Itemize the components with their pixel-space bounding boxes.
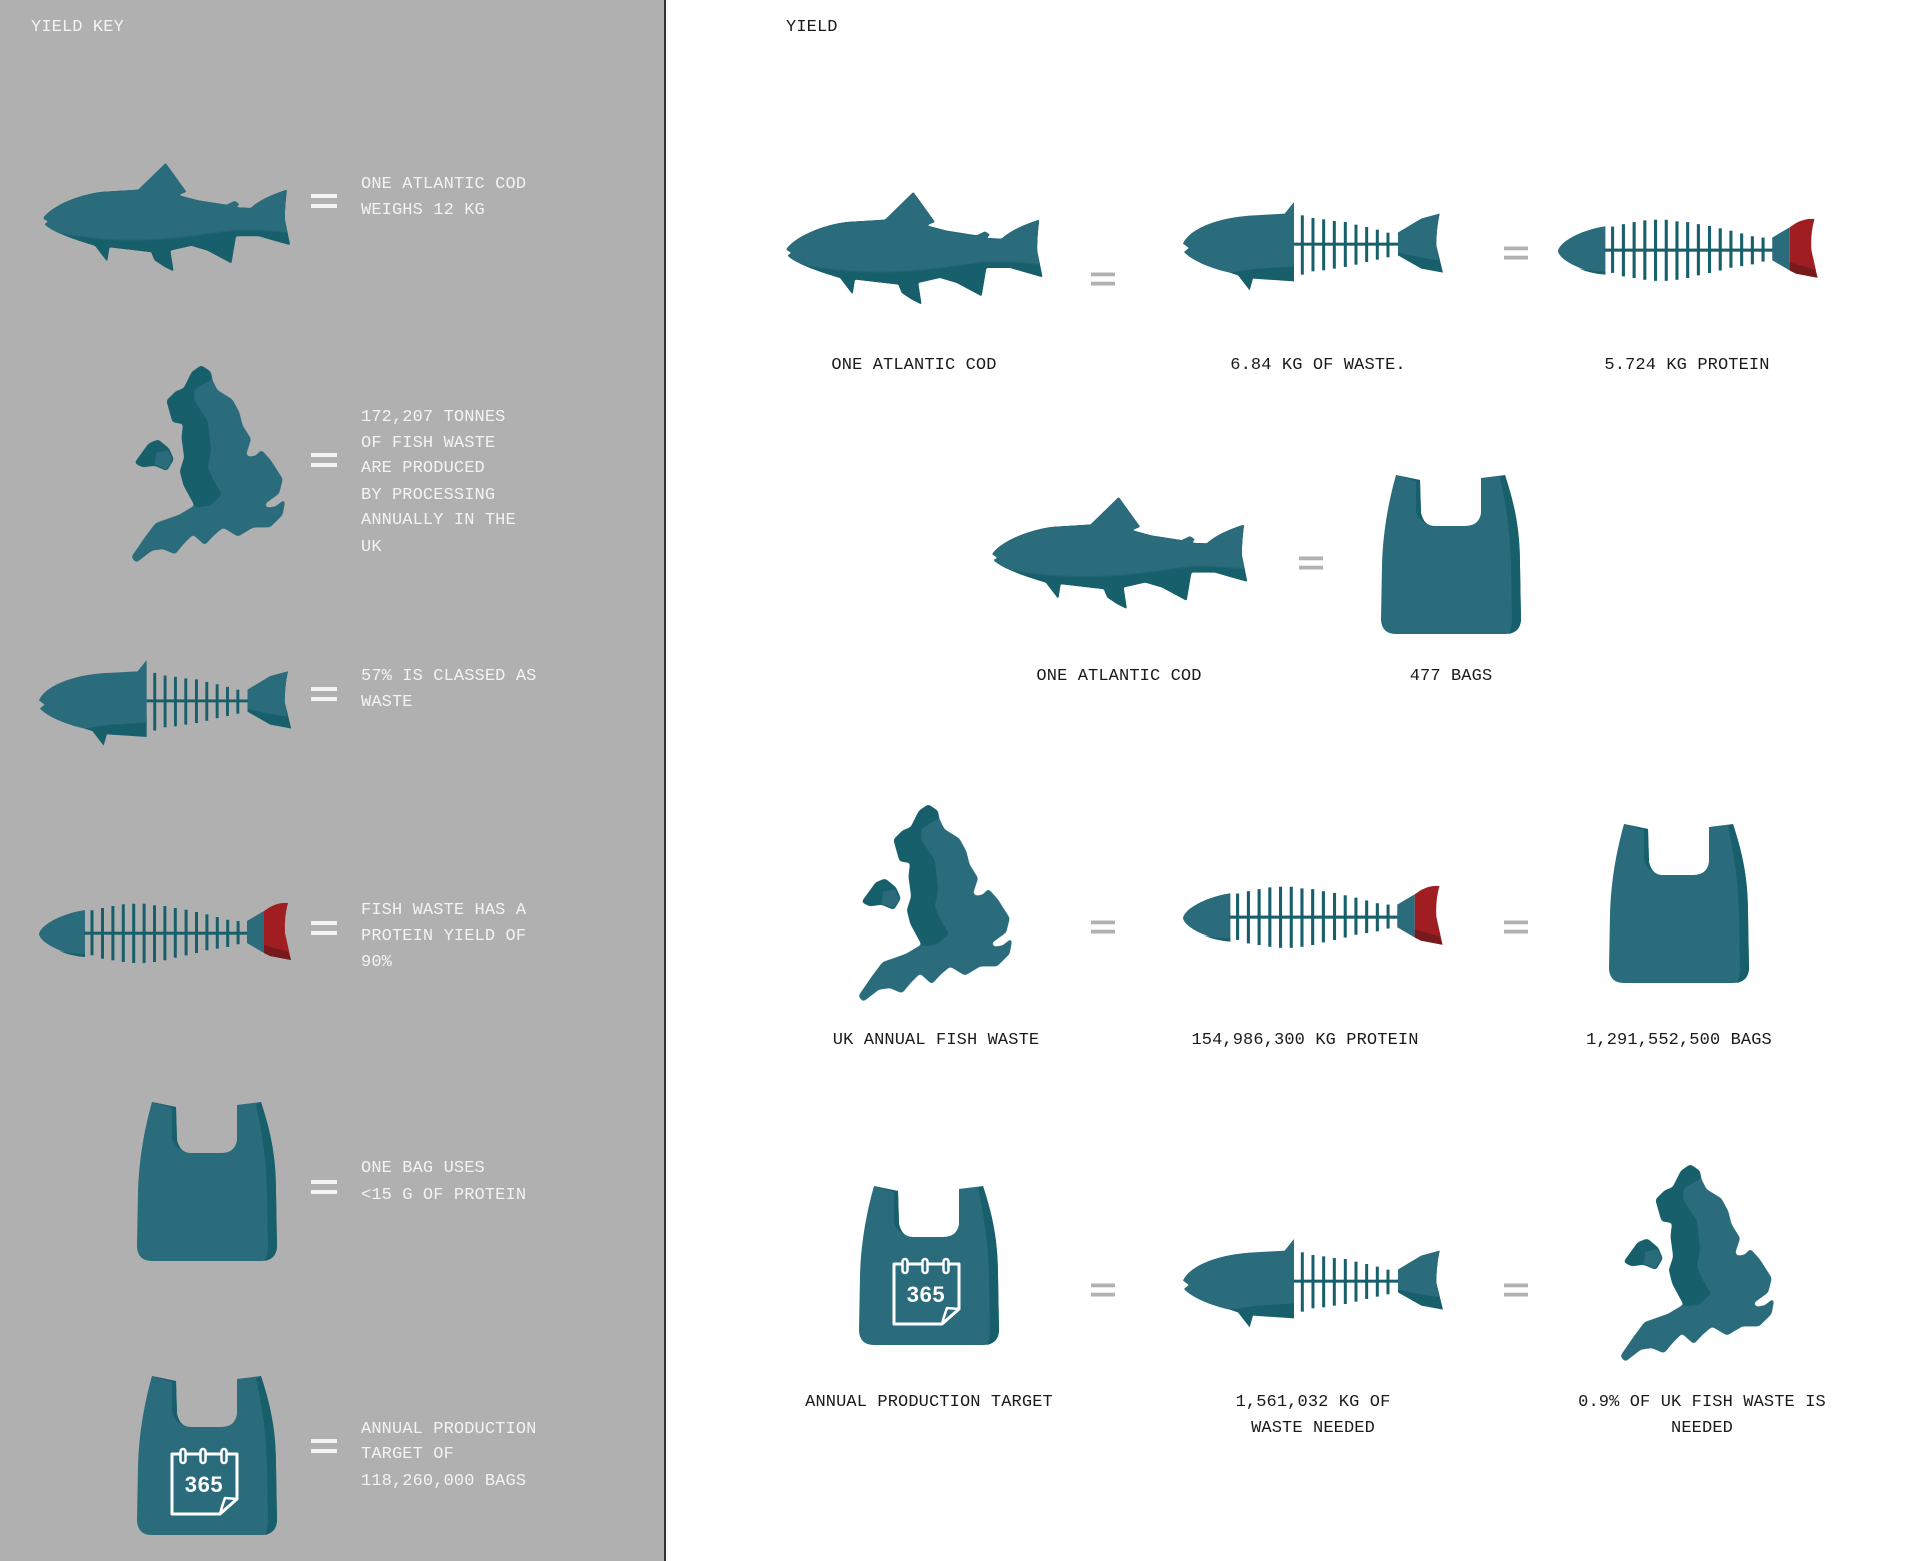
text: tonnes of waste: OF FISH WASTE <box>361 434 495 453</box>
equals sign <box>1504 920 1528 934</box>
label: waste needed: 1,561,032 KG OF <box>1236 1393 1390 1412</box>
equals sign <box>311 1180 337 1194</box>
text: production target: 118,260,000 BAGS <box>361 1472 526 1491</box>
label: percent of uk waste: 0.9% OF UK FISH WASTE IS <box>1578 1393 1826 1412</box>
text: production target: TARGET OF <box>361 1445 454 1464</box>
label: annual production target: ANNUAL PRODUCTION TARGET <box>805 1393 1053 1412</box>
equals sign <box>1091 272 1115 286</box>
panel divider line <box>664 0 666 1561</box>
equals sign <box>1091 920 1115 934</box>
text: production target: ANNUAL PRODUCTION <box>361 1420 536 1439</box>
key row: atlantic cod <box>43 163 526 272</box>
text: tonnes of waste: ARE PRODUCED <box>361 459 485 478</box>
label: one atlantic cod: ONE ATLANTIC COD <box>1036 667 1202 686</box>
icon: fish with exposed bones <box>39 660 291 746</box>
icon: bag with calendar: 365 <box>907 1282 945 1307</box>
equals sign <box>311 1439 337 1453</box>
key row: production target <box>137 1376 536 1535</box>
panel: yield key <box>31 18 536 1535</box>
icon: fish skeleton with red tail <box>1558 219 1818 281</box>
icon: whole fish <box>992 497 1247 609</box>
text: protein yield: FISH WASTE HAS A <box>361 901 527 920</box>
equals sign <box>311 921 337 935</box>
text: waste percent: 57% IS CLASSED AS <box>361 667 536 686</box>
heading: yield key: YIELD KEY <box>31 18 124 37</box>
text: bag protein: <15 G OF PROTEIN <box>361 1186 526 1205</box>
equals sign <box>1091 1284 1115 1296</box>
key row: one bag <box>137 1102 526 1261</box>
text: waste percent: WASTE <box>361 693 413 712</box>
icon: uk map <box>1622 1166 1773 1360</box>
icon: uk map <box>860 806 1011 1000</box>
text: bag protein: ONE BAG USES <box>361 1159 485 1178</box>
icon: whole fish <box>786 192 1043 305</box>
key row: waste share <box>39 660 536 746</box>
yield row 3: uk waste to bags <box>833 806 1772 1050</box>
yield row 4: target to waste needed <box>805 1166 1826 1438</box>
label: one atlantic cod: ONE ATLANTIC COD <box>831 356 997 375</box>
key row: uk fish waste <box>133 367 516 561</box>
label: uk annual fish waste: UK ANNUAL FISH WASTE <box>833 1031 1039 1050</box>
label: bags total: 1,291,552,500 BAGS <box>1586 1031 1772 1050</box>
text: tonnes of waste: 172,207 TONNES <box>361 408 506 427</box>
label: waste needed: WASTE NEEDED <box>1251 1419 1375 1438</box>
icon: fish with exposed bones <box>1183 202 1443 290</box>
key row: protein yield <box>39 901 527 972</box>
label: protein kg: 154,986,300 KG PROTEIN <box>1191 1031 1419 1050</box>
equals sign <box>311 194 337 208</box>
label: protein kg: 5.724 KG PROTEIN <box>1604 356 1770 375</box>
label: waste kg: 6.84 KG OF WASTE. <box>1230 356 1406 375</box>
icon: bag with calendar <box>859 1186 999 1345</box>
icon: bag <box>137 1102 277 1261</box>
text: tonnes of waste: BY PROCESSING <box>361 486 495 505</box>
text: cod weight: ONE ATLANTIC COD <box>361 175 526 194</box>
icon: fish with exposed bones <box>1183 1239 1443 1327</box>
icon: whole fish <box>43 163 290 272</box>
text: protein yield: PROTEIN YIELD OF <box>361 927 526 946</box>
equals sign <box>1504 1284 1528 1296</box>
icon: bag with calendar <box>137 1376 277 1535</box>
label: 477 bags: 477 BAGS <box>1410 667 1492 686</box>
heading: yield: YIELD <box>786 18 838 37</box>
equals sign <box>1299 556 1323 570</box>
icon: bag <box>1609 824 1749 983</box>
icon: fish skeleton with red tail <box>39 903 291 963</box>
panel: yield key background <box>0 0 664 1561</box>
yield row 1: cod to protein <box>786 192 1818 375</box>
yield row 2: cod to bags <box>992 475 1521 686</box>
equals sign <box>311 453 337 467</box>
icon: bag with calendar: 365 <box>185 1472 223 1497</box>
equals sign <box>311 687 337 701</box>
text: cod weight: WEIGHS 12 KG <box>361 201 485 220</box>
icon: fish skeleton with red tail <box>1183 886 1443 948</box>
icon: bag <box>1381 475 1521 634</box>
equals sign <box>1504 246 1528 260</box>
text: tonnes of waste: UK <box>361 538 382 557</box>
label: percent of uk waste: NEEDED <box>1671 1419 1733 1438</box>
text: protein yield: 90% <box>361 953 393 972</box>
icon: uk map <box>133 367 284 561</box>
text: tonnes of waste: ANNUALLY IN THE <box>361 511 516 530</box>
panel: yield <box>786 18 1826 1438</box>
